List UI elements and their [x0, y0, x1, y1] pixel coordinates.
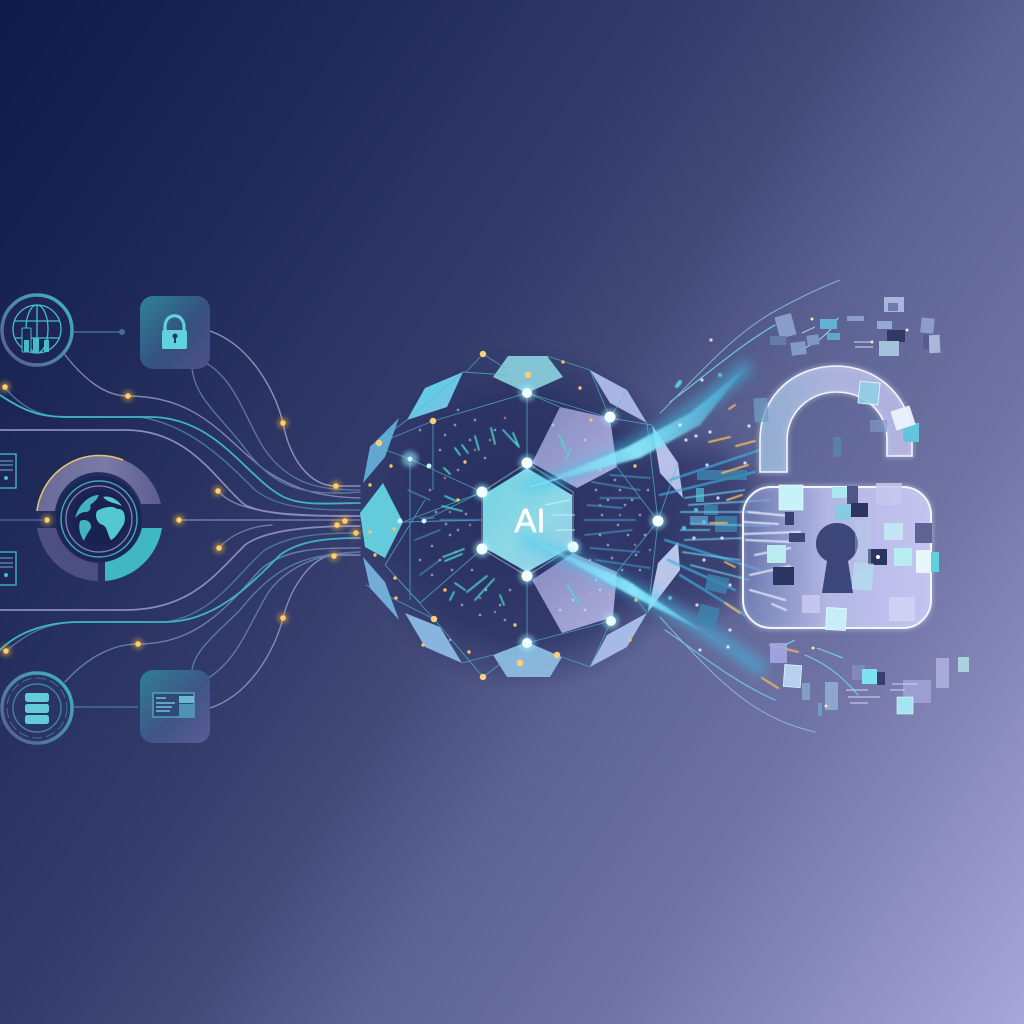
padlock, open shackle	[743, 366, 932, 628]
AI hexagon	[483, 468, 572, 572]
keyhole	[816, 523, 858, 593]
upper arc segment	[37, 455, 161, 511]
gold arc edge	[37, 455, 123, 511]
hexagon streaks	[530, 478, 575, 530]
icon: dashboard tile	[140, 670, 210, 743]
connector: globe badge to lock tile	[74, 331, 120, 333]
notch	[915, 523, 932, 543]
facet panes	[363, 370, 683, 667]
label: AI: AI	[514, 502, 546, 539]
gold nodes on network lines	[5, 387, 356, 651]
globe	[73, 491, 127, 545]
lilac hexagon lower right	[532, 553, 617, 633]
lower beam glow	[525, 540, 760, 668]
data particles white	[420, 410, 648, 640]
upper fragment cluster	[770, 297, 940, 356]
top pentagon	[493, 356, 563, 393]
shackle	[760, 366, 912, 472]
icon: document top	[0, 454, 16, 488]
sphere: AI polyhedron	[360, 354, 683, 677]
wire mesh	[366, 354, 678, 677]
lower right arc segment	[105, 528, 162, 581]
connector: server badge to dashboard tile	[74, 706, 138, 708]
small gold sparks	[370, 362, 636, 652]
bottom pentagon	[493, 642, 562, 677]
icon: server badge	[2, 673, 72, 743]
icon: globe with city badge	[2, 295, 72, 365]
data particles gold and teal dots	[445, 418, 650, 612]
network lines converging on the sphere	[0, 331, 360, 708]
sphere: soft dark backing	[352, 342, 702, 692]
left teal hexagon	[360, 483, 403, 558]
inner dial rings	[56, 476, 142, 562]
lower beam	[525, 537, 760, 668]
upper beam glow	[530, 368, 745, 487]
data beams leaving the sphere	[525, 280, 858, 732]
chart: donut gauge with globe	[37, 455, 162, 581]
glass fragments over the lock	[753, 297, 969, 716]
data dash matrix	[408, 475, 650, 575]
lock body	[743, 487, 931, 628]
icon: lock tile	[140, 296, 210, 369]
gold sphere nodes	[379, 354, 557, 677]
white glowing nodes	[400, 393, 658, 643]
stream: soft dark backing	[625, 443, 765, 613]
data particles teal	[442, 428, 580, 605]
body fragments	[767, 483, 939, 631]
connector: left document line	[0, 519, 45, 521]
streak band across body left	[744, 512, 800, 610]
lock body glow	[743, 487, 931, 628]
gap at top of body	[847, 486, 858, 504]
shackle fragments	[753, 381, 919, 457]
lower fragment cluster	[770, 640, 969, 716]
connector node	[119, 329, 125, 335]
upper beam	[530, 368, 745, 487]
lower left arc segment	[37, 528, 98, 581]
icon: document bottom	[0, 552, 16, 585]
shackle glow	[760, 366, 912, 472]
data stream between sphere and lock	[670, 340, 798, 688]
lilac hexagon upper right	[532, 407, 617, 488]
AI hexagon edge bonds	[482, 463, 573, 576]
